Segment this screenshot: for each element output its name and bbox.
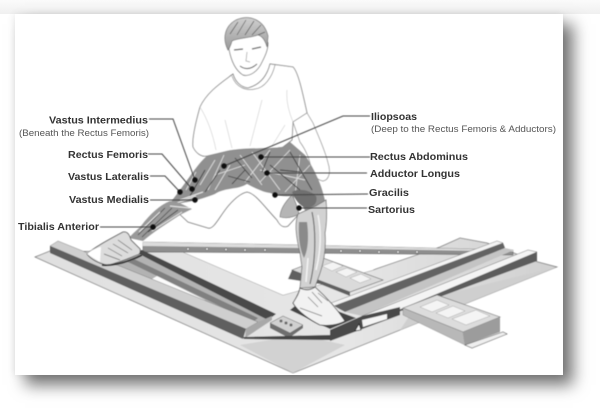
pad front (403, 295, 507, 348)
label: Iliopsoas: Iliopsoas (371, 111, 417, 123)
label: Rectus Abdominus: Rectus Abdominus (370, 151, 468, 163)
bumper plate with bolts (243, 316, 331, 340)
pad back (288, 258, 383, 296)
label: Vastus Intermedius: Vastus Intermedius (49, 114, 148, 126)
central cross bar (143, 242, 513, 255)
left muscle labels (18, 114, 149, 233)
right muscle labels (368, 111, 556, 216)
note: beneath the rectus femoris: (Beneath the Rectus Femoris) (19, 128, 149, 138)
label: Rectus Femoris: Rectus Femoris (68, 149, 148, 161)
brand logo on rail end (355, 324, 361, 331)
slide board platform (35, 238, 557, 373)
right lower leg (296, 200, 327, 288)
base mat (35, 238, 557, 373)
note: deep to the rectus femoris and adductors: (Deep to the Rectus Femoris & Adductors) (371, 124, 556, 134)
athlete figure (87, 18, 345, 325)
left rail assembly (50, 241, 276, 339)
gracilis oval (292, 190, 317, 208)
muscled left thigh and pelvis (170, 142, 326, 212)
label: Vastus Medialis: Vastus Medialis (69, 194, 149, 206)
marker dots (150, 154, 302, 230)
leader lines (100, 116, 370, 227)
right shoe (293, 287, 345, 325)
label: Vastus Lateralis: Vastus Lateralis (68, 171, 149, 183)
label: Tibialis Anterior: Tibialis Anterior (18, 221, 99, 233)
label: Adductor Longus: Adductor Longus (370, 168, 460, 180)
label: Sartorius: Sartorius (368, 204, 415, 216)
shirt (193, 64, 307, 156)
sartorius shaded wedge (280, 195, 299, 218)
forearm and hand (293, 113, 329, 181)
shorts (172, 175, 298, 228)
right rail assembly (330, 241, 537, 341)
head (225, 18, 268, 75)
label: Gracilis: Gracilis (369, 187, 409, 199)
dark shadow under right foot (290, 302, 356, 329)
left shoe (87, 232, 142, 265)
left shin muscles (129, 201, 192, 241)
